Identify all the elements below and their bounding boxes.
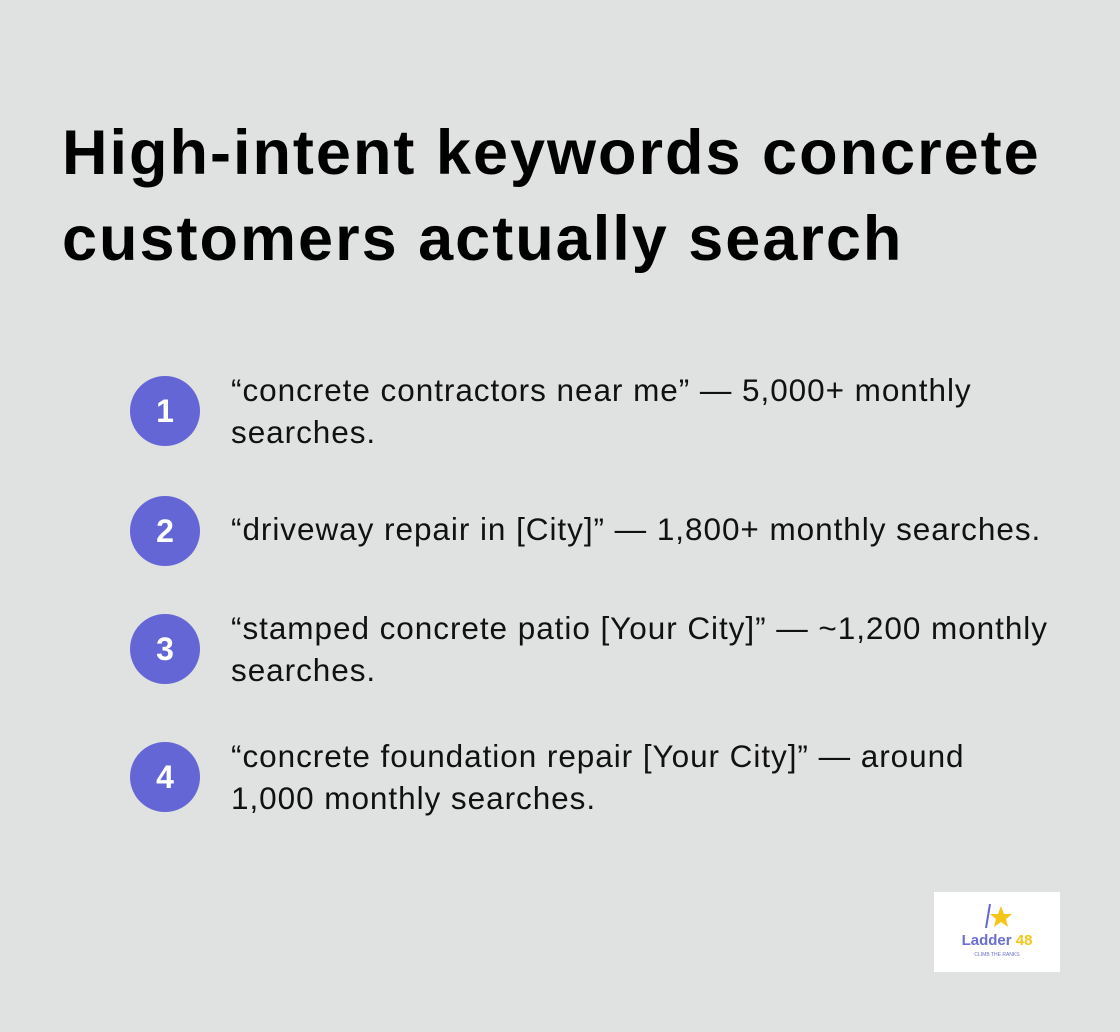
badge 2 (130, 496, 200, 566)
title: customers actually search (62, 204, 903, 274)
text 3 (231, 610, 1048, 688)
item 4 (130, 738, 965, 816)
title: High-intent keywords concrete (62, 118, 1041, 188)
logo: CLIMB THE RANKS (974, 952, 1020, 958)
badge 2: 2 (156, 513, 174, 549)
text 4: 1,000 monthly searches. (231, 780, 596, 816)
badge 3: 3 (156, 631, 174, 667)
item 3 (130, 610, 1048, 688)
item 2 (130, 496, 1041, 566)
text 3: “stamped concrete patio [Your City]” — ~1,200 monthly (231, 610, 1048, 646)
logo (934, 892, 1060, 972)
badge 4: 4 (156, 759, 174, 795)
title (62, 118, 1041, 274)
badge 3 (130, 614, 200, 684)
text 4 (231, 738, 965, 816)
badge 1 (130, 376, 200, 446)
text 3: searches. (231, 652, 376, 688)
text 1: searches. (231, 414, 376, 450)
text 1 (231, 372, 972, 450)
logo text: Ladder 48 (962, 932, 1032, 949)
item 1 (130, 372, 972, 450)
text 1: “concrete contractors near me” — 5,000+ monthly (231, 372, 972, 408)
text 4: “concrete foundation repair [Your City]” — around (231, 738, 965, 774)
text 2: “driveway repair in [City]” — 1,800+ monthly searches. (231, 511, 1041, 547)
icon: ladder star (985, 904, 1012, 928)
badge 4 (130, 742, 200, 812)
badge 1: 1 (156, 393, 174, 429)
